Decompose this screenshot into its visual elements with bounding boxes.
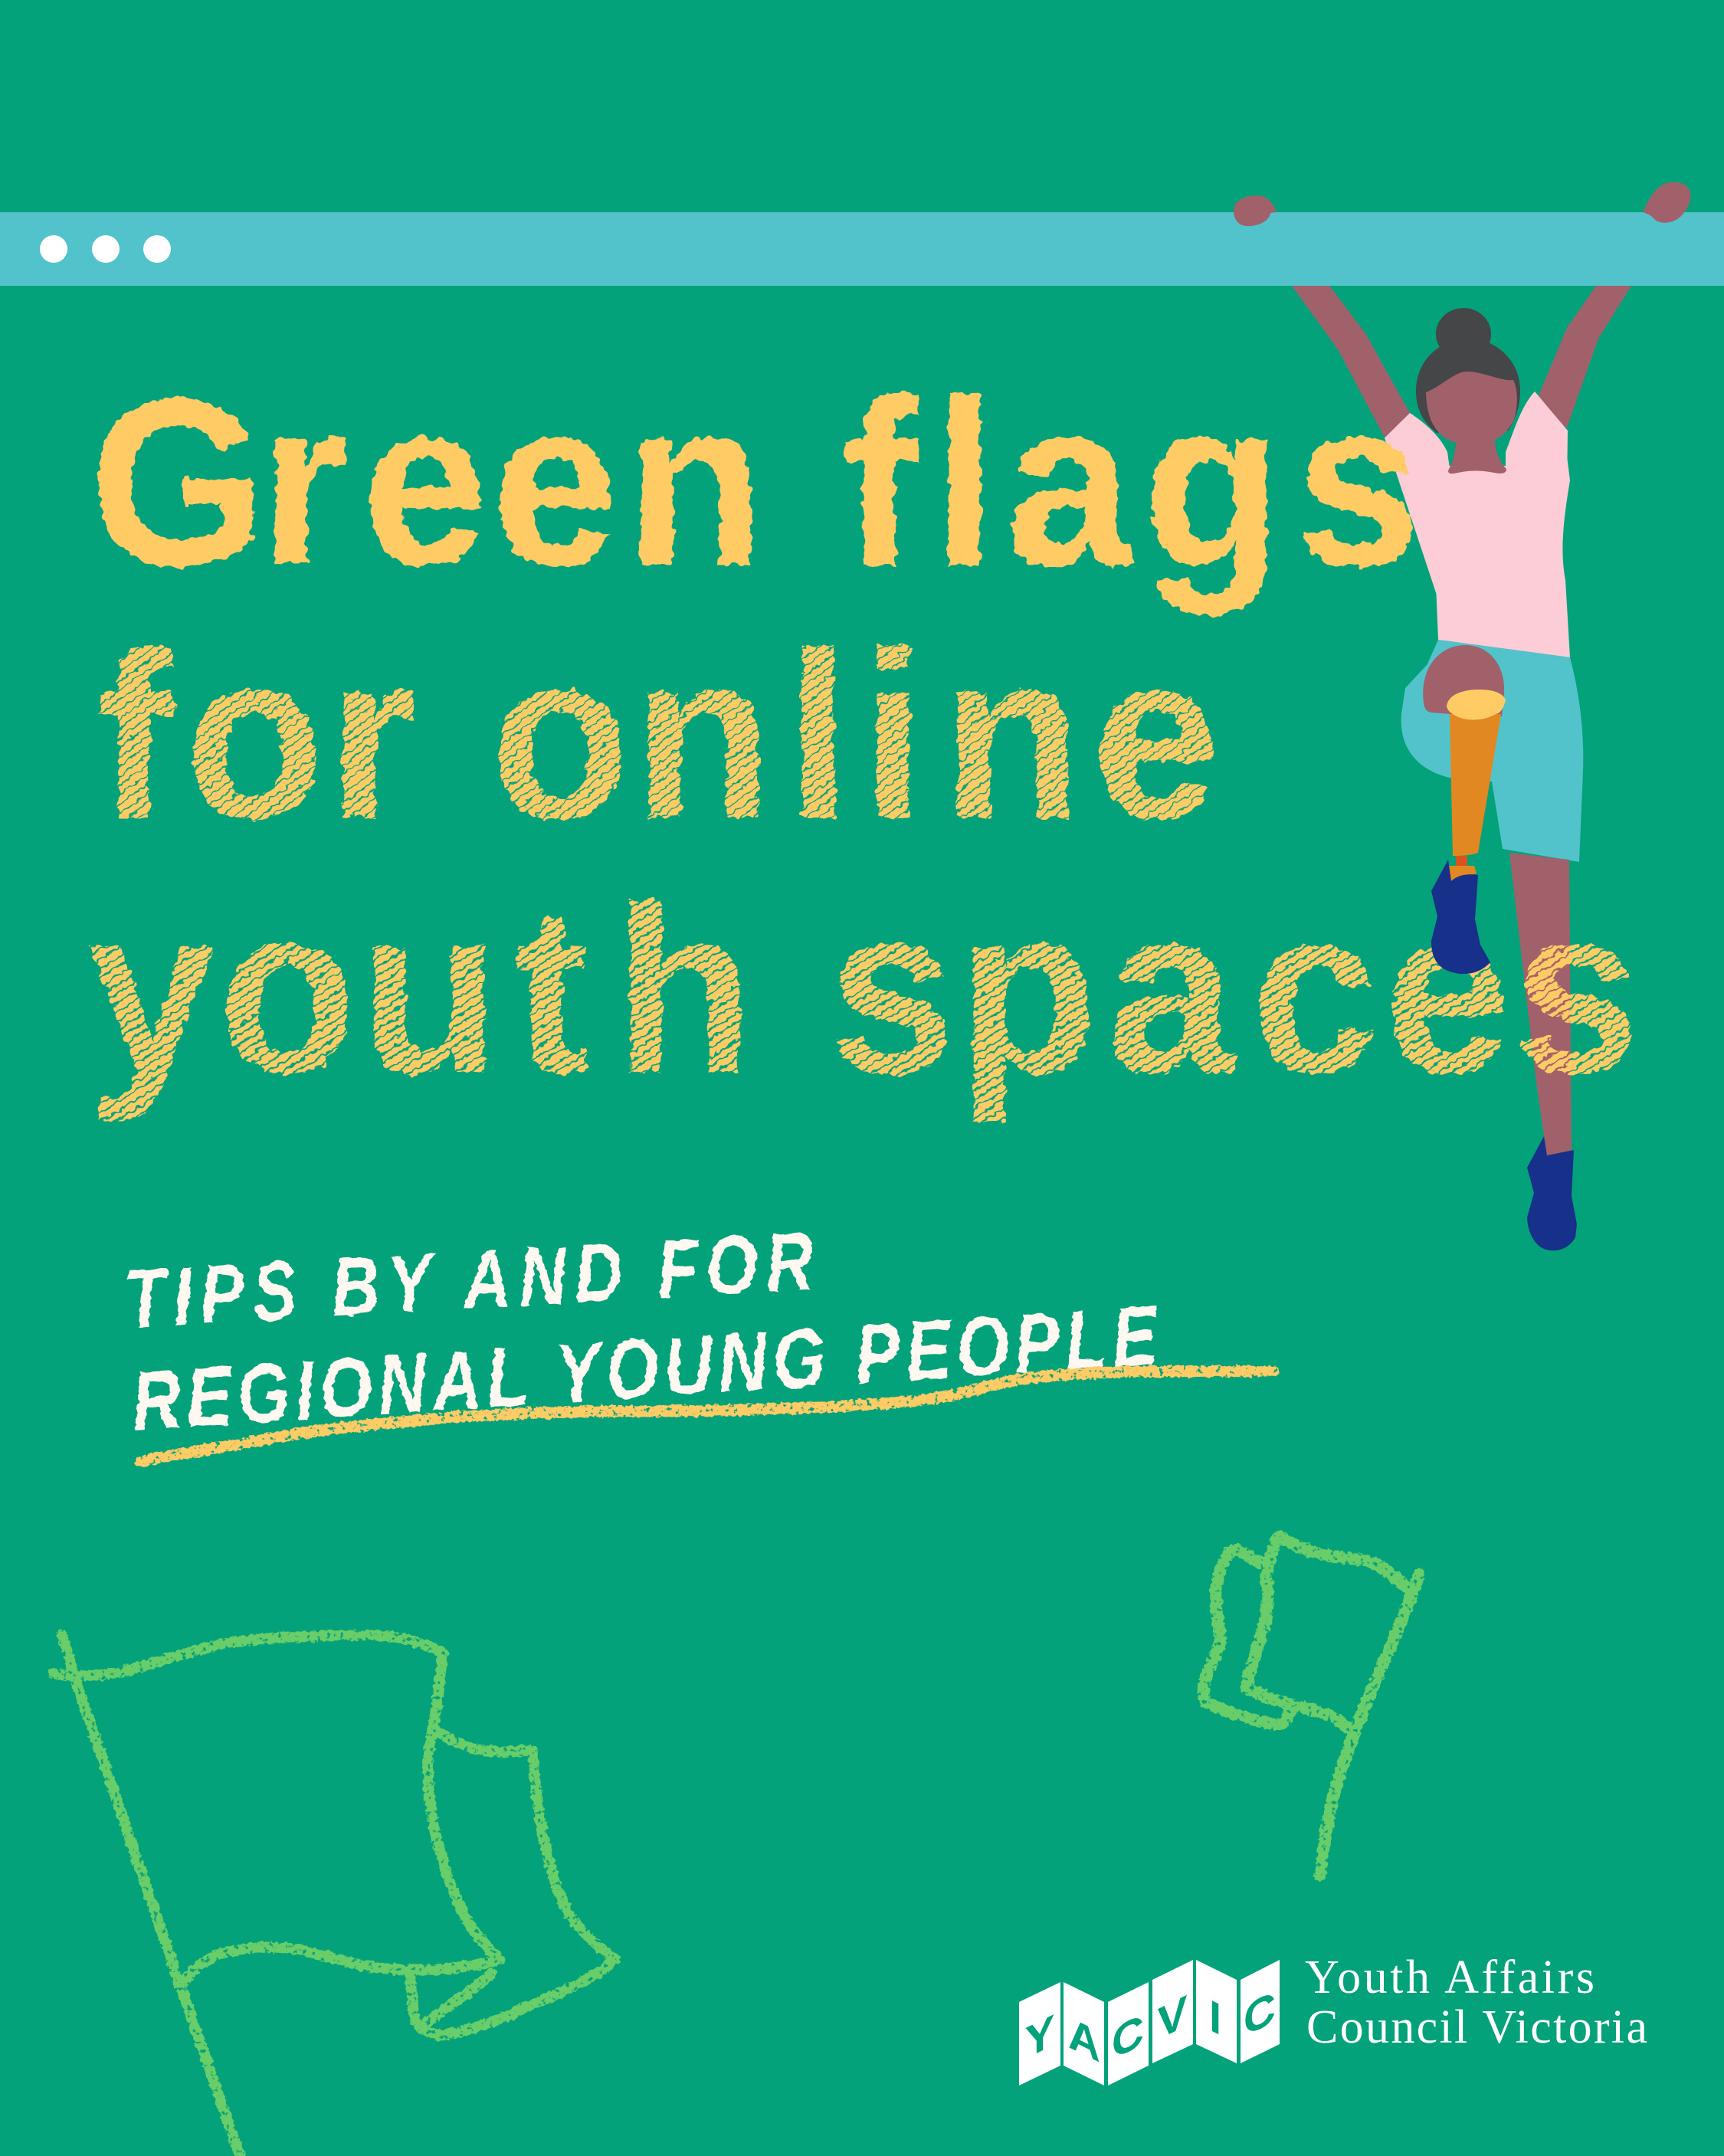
logo wordmark: Council Victoria bbox=[1306, 2001, 1647, 2053]
arms bbox=[1292, 286, 1631, 452]
tagline underline bbox=[141, 1371, 1273, 1462]
flag doodle: large flag bbox=[54, 1635, 615, 2155]
shorts bbox=[1401, 640, 1583, 862]
title line 1: Green flags bbox=[89, 350, 1421, 617]
thigh bbox=[1423, 645, 1504, 716]
browser bar bbox=[0, 212, 1724, 286]
logo wordmark: Youth Affairs bbox=[1305, 1951, 1595, 2004]
title: Green flags for online youth spaces bbox=[87, 350, 1640, 1124]
logo mark panels bbox=[1019, 1960, 1280, 2086]
standing leg bbox=[1509, 853, 1572, 1157]
logo mark letters: I bbox=[1209, 1990, 1221, 2046]
shirt bbox=[1385, 392, 1570, 657]
title line 2: for online bbox=[97, 603, 1220, 868]
logo mark letters: C bbox=[1112, 2004, 1144, 2069]
illustration: person hanging from bar bbox=[1234, 182, 1690, 1250]
tagline line 1: TIPS BY AND FOR bbox=[123, 1214, 816, 1345]
flag doodle: small flag bbox=[1204, 1536, 1419, 1875]
hair bbox=[1416, 308, 1520, 433]
title line 3: youth spaces bbox=[87, 857, 1640, 1124]
logo mark letters bbox=[1025, 1981, 1276, 2072]
hands bbox=[1234, 182, 1690, 226]
tagline text bbox=[123, 1214, 1162, 1449]
icon: raised boot bbox=[1431, 860, 1490, 974]
logo mark letters: A bbox=[1068, 2007, 1100, 2072]
neck and face bbox=[1426, 372, 1517, 473]
logo mark letters: Y bbox=[1025, 2005, 1054, 2069]
logo mark letters: C bbox=[1244, 1981, 1276, 2046]
boot: standing foot bbox=[1527, 1136, 1577, 1250]
logo mark letters: V bbox=[1158, 1986, 1187, 2050]
logo wordmark bbox=[1305, 1951, 1647, 2053]
logo: YACVIC bbox=[1019, 1951, 1647, 2086]
tagline line 2: REGIONAL YOUNG PEOPLE bbox=[129, 1289, 1162, 1449]
prosthetic leg bbox=[1447, 690, 1506, 881]
